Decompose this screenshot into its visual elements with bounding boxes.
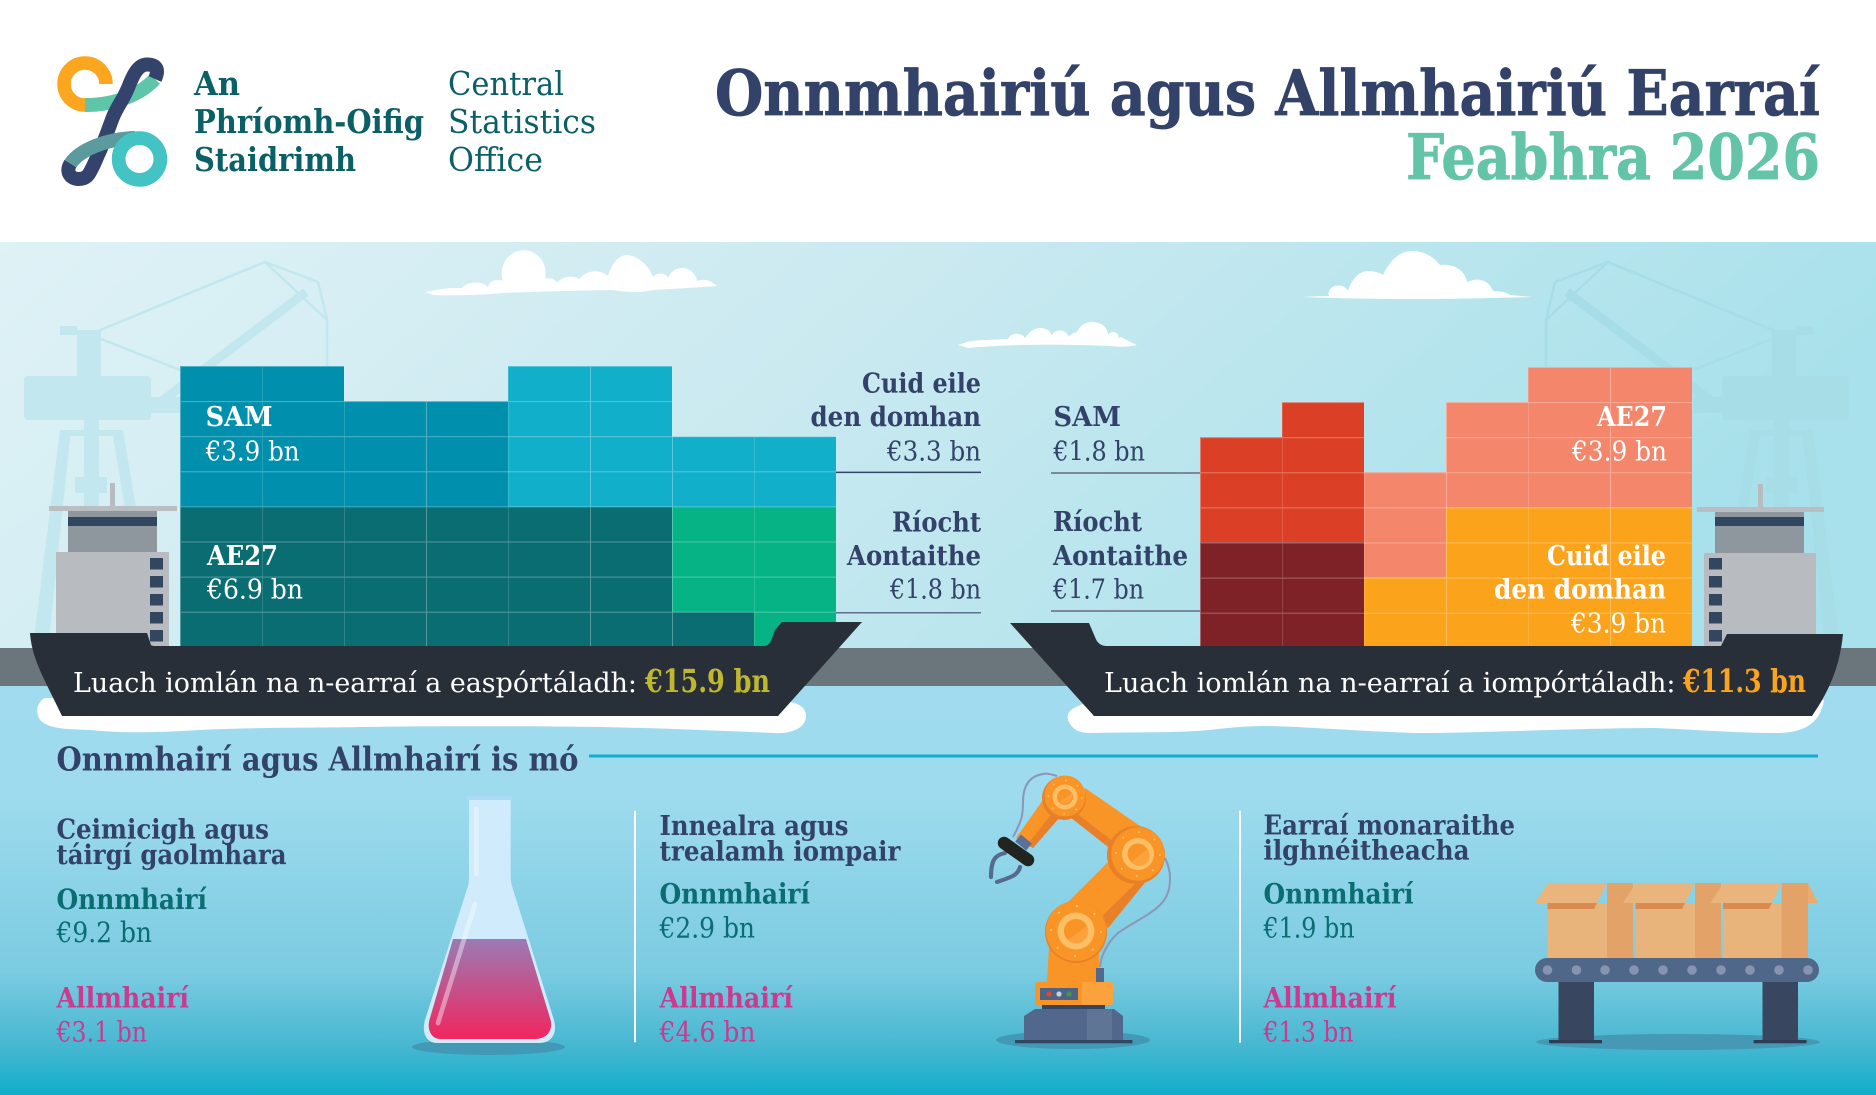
- label: rest of world imports: €3.9 bn: [1570, 609, 1666, 640]
- heading: chemicals: [56, 814, 286, 871]
- label: UK imports: [1051, 507, 1200, 612]
- sea background: [0, 686, 1876, 1095]
- icon: flask: [412, 796, 565, 1055]
- label: rest of world exports: den domhan: [810, 402, 981, 433]
- exports value: Onnmhairí: [660, 877, 810, 910]
- heading: manufactured goods: ilghnéitheacha: [1264, 835, 1470, 866]
- logo: CSO mark: [64, 63, 160, 180]
- label: rest of world exports: [810, 369, 981, 473]
- label: SAM exports: [205, 402, 300, 468]
- logo: English name: Statistics: [448, 102, 596, 141]
- label: SAM imports: €1.8 bn: [1053, 437, 1145, 468]
- import total: €11.3 bn: [1682, 662, 1806, 700]
- imports value: [56, 982, 189, 1049]
- label: AE27 imports: [1571, 402, 1667, 468]
- quay band: [0, 648, 1876, 686]
- export total: €15.9 bn: [644, 662, 770, 700]
- logo: Irish name: An: [193, 64, 240, 103]
- background crane left: [24, 262, 327, 648]
- logo: Irish name: Phríomh-Oifig: [194, 102, 424, 141]
- export total: Luach iomlán na n-earraí a easpórtáladh:: [73, 667, 637, 699]
- heading: chemicals: Ceimicigh agus: [56, 814, 269, 845]
- label: UK exports: [836, 508, 981, 614]
- exports value: €9.2 bn: [56, 916, 152, 949]
- imports value: Allmhairí: [56, 982, 189, 1015]
- label: rest of world imports: [1494, 541, 1666, 640]
- imports value: €4.6 bn: [659, 1016, 756, 1049]
- ship hull right: [1010, 623, 1843, 716]
- label: rest of world exports: Cuid eile: [862, 369, 981, 400]
- logo: Irish name: Staidrimh: [194, 140, 356, 179]
- cloud middle: [958, 322, 1137, 348]
- cloud right: [1303, 251, 1533, 299]
- panel: manufactured goods: [1263, 810, 1515, 1049]
- label: AE27 exports: AE27: [206, 541, 278, 572]
- label: SAM exports: €3.9 bn: [205, 437, 300, 468]
- heading: machinery: [660, 811, 901, 868]
- export containers stack: [180, 366, 836, 648]
- label: SAM imports: [1051, 402, 1200, 474]
- foam left: [37, 698, 806, 733]
- label: AE27 exports: [206, 541, 303, 605]
- label: rest of world imports: Cuid eile: [1547, 541, 1666, 572]
- label: UK imports: Ríocht: [1053, 507, 1142, 538]
- label: rest of world imports: den domhan: [1494, 574, 1666, 605]
- imports value: Allmhairí: [659, 982, 793, 1015]
- exports value: [1263, 877, 1414, 944]
- label: AE27 imports: AE27: [1596, 402, 1667, 433]
- logo: English name: Office: [448, 140, 543, 179]
- divider: [1239, 811, 1241, 1043]
- exports value: Onnmhairí: [1264, 877, 1414, 910]
- heading: manufactured goods: [1264, 810, 1515, 866]
- heading: chemicals: táirgí gaolmhara: [56, 840, 286, 871]
- panel: machinery: [659, 811, 901, 1049]
- label: UK exports: Ríocht: [892, 508, 981, 539]
- label: SAM exports: SAM: [206, 402, 273, 433]
- imports value: €1.3 bn: [1263, 1016, 1354, 1049]
- exports value: [56, 883, 207, 949]
- label: SAM imports: SAM: [1053, 402, 1121, 433]
- sky background: [0, 242, 1876, 650]
- label: AE27 exports: €6.9 bn: [206, 574, 303, 605]
- divider: [634, 811, 636, 1042]
- label: AE27 imports: €3.9 bn: [1571, 437, 1667, 468]
- label: UK exports: Aontaithe: [846, 541, 981, 572]
- exports value: Onnmhairí: [56, 883, 207, 916]
- cloud left: [425, 250, 717, 295]
- ship superstructure right: [1697, 484, 1824, 648]
- section heading: Onnmhairí agus Allmhairí is mó: [56, 740, 578, 779]
- exports value: €2.9 bn: [659, 912, 755, 945]
- exports value: [659, 877, 810, 945]
- export total: [73, 662, 770, 700]
- title: [715, 56, 1820, 194]
- panel: chemicals: [56, 814, 287, 1049]
- heading: manufactured goods: Earraí monaraithe: [1264, 810, 1515, 841]
- logo: English name: [448, 64, 596, 179]
- label: UK imports: €1.7 bn: [1052, 574, 1144, 605]
- import total: [1104, 662, 1806, 700]
- import containers stack: [1200, 367, 1692, 648]
- foam right: [1068, 700, 1824, 733]
- section rule: [589, 754, 1818, 758]
- logo: Irish name: [193, 64, 424, 179]
- icon: robot arm: [991, 774, 1170, 1049]
- logo: English name: Central: [448, 64, 564, 103]
- imports value: Allmhairí: [1263, 982, 1397, 1015]
- label: UK exports: €1.8 bn: [889, 574, 981, 605]
- imports value: €3.1 bn: [56, 1016, 147, 1049]
- exports value: €1.9 bn: [1263, 911, 1354, 944]
- icon: conveyor with boxes: [1535, 883, 1820, 1050]
- header background: [0, 0, 1876, 242]
- ship superstructure left: [49, 483, 177, 647]
- heading: machinery: trealamh iompair: [660, 837, 901, 868]
- ship hull left: [30, 622, 862, 716]
- background crane right: [1546, 262, 1849, 648]
- imports value: [1263, 982, 1397, 1049]
- imports value: [659, 982, 793, 1049]
- label: UK imports: Aontaithe: [1052, 541, 1188, 572]
- import total: Luach iomlán na n-earraí a iompórtáladh:: [1104, 667, 1676, 699]
- heading: machinery: Innealra agus: [660, 811, 848, 842]
- title: Feabhra 2026: [1406, 120, 1820, 194]
- label: rest of world exports: €3.3 bn: [886, 437, 981, 468]
